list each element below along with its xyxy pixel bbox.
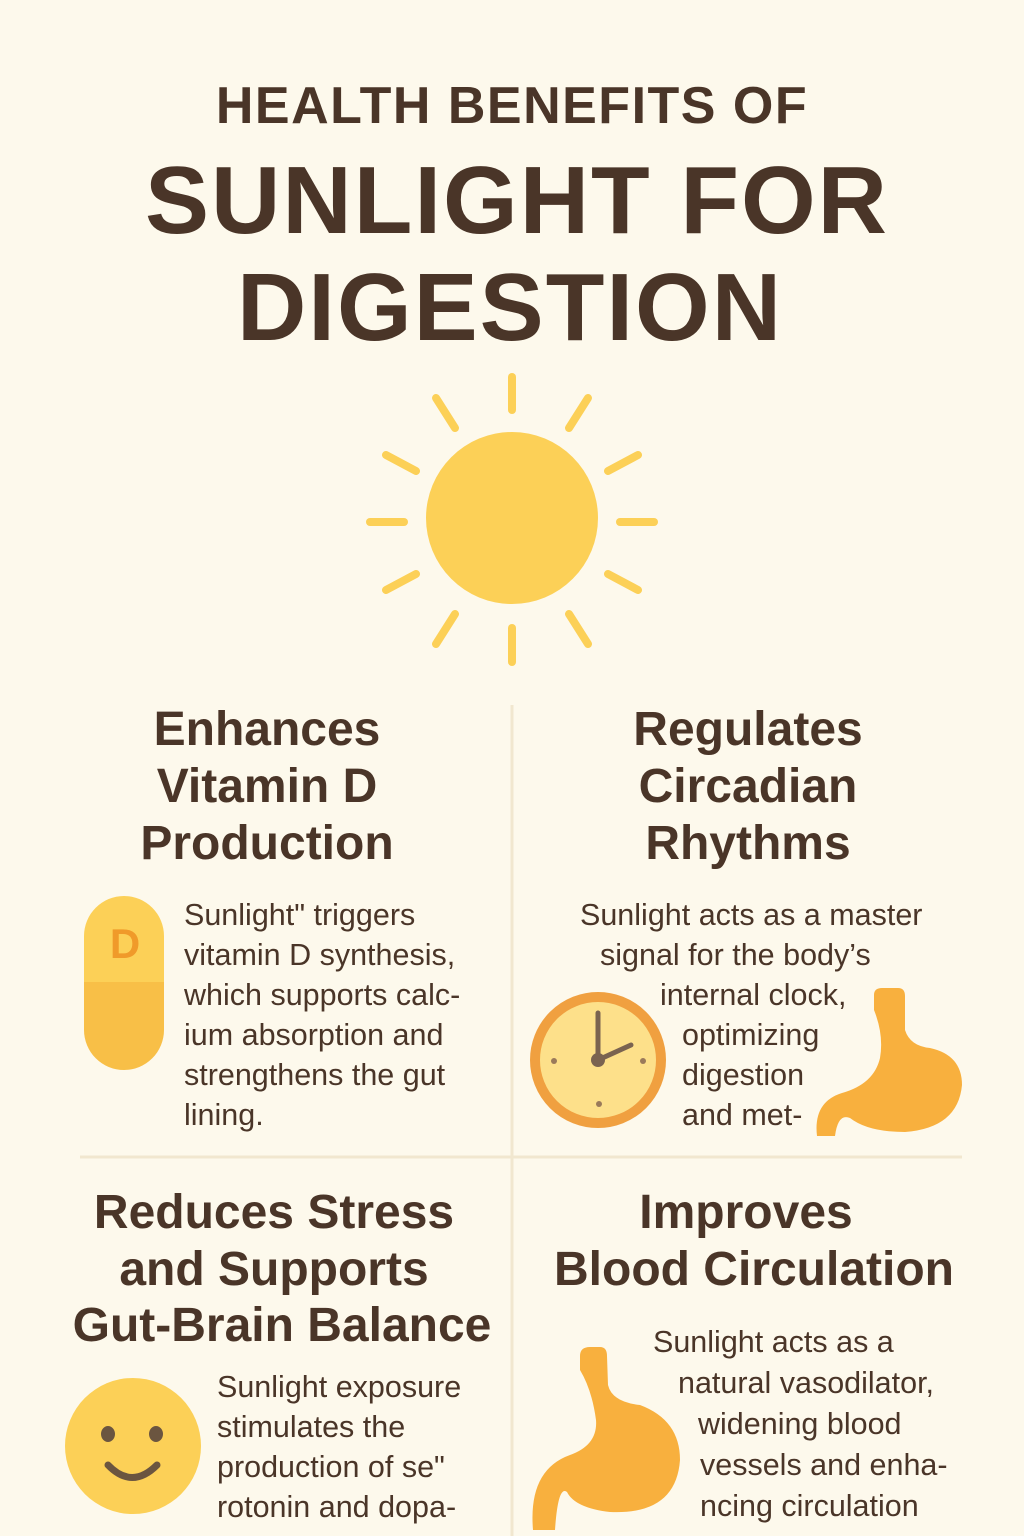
- text: circulation body: vessels and enha-: [700, 1448, 948, 1482]
- text: vitamin D body: lining.: [184, 1098, 264, 1132]
- text: circadian body: signal for the body’s: [600, 938, 871, 972]
- title: [145, 77, 889, 361]
- text: circadian body: Sunlight acts as a master: [580, 898, 922, 932]
- heading: circadian: Rhythms: [645, 817, 851, 870]
- text: stress body: stimulates the: [217, 1410, 405, 1444]
- text: vitamin D body: which supports calc-: [183, 978, 460, 1012]
- text: circadian body: and met-: [682, 1098, 802, 1132]
- title: HEALTH BENEFITS OF: [216, 77, 808, 135]
- panel: circulation: [532, 1186, 954, 1530]
- text: circadian body: digestion: [682, 1058, 804, 1092]
- text: vitamin D body: ium absorption and: [184, 1018, 443, 1052]
- text: circulation body: natural vasodilator,: [678, 1366, 934, 1400]
- text: vitamin D body: strengthens the gut: [184, 1058, 446, 1092]
- icon: vitamin D pill: [84, 896, 164, 1070]
- text: vitamin D body: Sunlight" triggers: [184, 898, 415, 932]
- heading: vitamin D: Vitamin D: [157, 760, 377, 813]
- text: stress body: rotonin and dopa-: [217, 1490, 456, 1524]
- text: stress body: production of se": [217, 1450, 445, 1484]
- text: circadian body: internal clock,: [660, 978, 846, 1012]
- heading: stress: Gut-Brain Balance: [73, 1299, 491, 1352]
- title: DIGESTION: [237, 254, 783, 361]
- text: circadian body: optimizing: [682, 1018, 819, 1052]
- icon: smiley: [65, 1378, 201, 1514]
- heading: circulation: Blood Circulation: [554, 1243, 954, 1296]
- icon: clock: [535, 997, 661, 1123]
- panel: circadian: [535, 703, 962, 1136]
- text: vitamin D body: vitamin D synthesis,: [184, 938, 455, 972]
- panel: stress: [65, 1186, 491, 1524]
- panel: vitamin D: [84, 703, 460, 1132]
- text: circulation body: widening blood: [697, 1407, 902, 1441]
- heading: vitamin D: Production: [140, 817, 394, 870]
- heading: vitamin D: Enhances: [154, 703, 380, 756]
- text: circulation body: ncing circulation: [700, 1489, 919, 1523]
- text: circulation body: Sunlight acts as a: [653, 1325, 894, 1359]
- heading: stress: and Supports: [119, 1243, 429, 1296]
- icon: stomach: [817, 988, 962, 1136]
- heading: stress: Reduces Stress: [94, 1186, 454, 1239]
- title: SUNLIGHT FOR: [145, 147, 889, 254]
- icon: sun: [370, 377, 654, 662]
- text: stress body: Sunlight exposure: [217, 1370, 461, 1404]
- heading: circulation: Improves: [639, 1186, 853, 1239]
- icon: vitamin D pill: D: [110, 920, 140, 967]
- icon: stomach 2: [532, 1347, 680, 1530]
- heading: circadian: Regulates: [633, 703, 863, 756]
- heading: circadian: Circadian: [639, 760, 857, 813]
